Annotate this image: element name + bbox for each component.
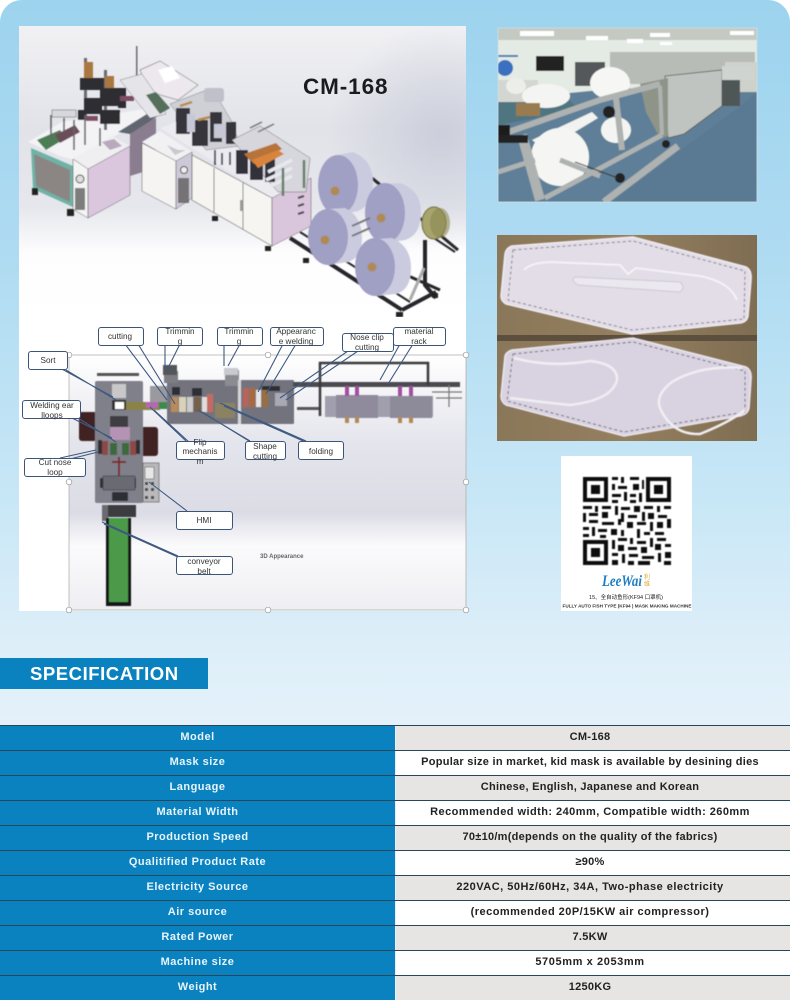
callout text: Cut nose <box>39 458 72 467</box>
callout text: mechanis <box>182 447 218 456</box>
callout text: belt <box>197 567 211 576</box>
heading: SPECIFICATION: SPECIFICATION <box>30 663 179 684</box>
QR caption: 15、全自动鱼形(KF94 口罩机) <box>589 593 663 601</box>
specification table <box>0 725 790 1000</box>
specification table: Air source <box>168 906 227 918</box>
callout text: Flip <box>193 438 207 447</box>
specification table: Production Speed <box>146 831 249 843</box>
specification table: Recommended width: 240mm, Compatible width: 260mm <box>430 806 750 818</box>
left station frame <box>31 148 73 207</box>
callout text: conveyor <box>187 557 221 566</box>
specification table: Electricity Source <box>147 881 248 893</box>
callout text: material <box>404 327 434 336</box>
front stations <box>232 126 310 192</box>
specification table: (recommended 20P/15KW air compressor) <box>471 906 709 918</box>
mid stations <box>170 88 240 150</box>
model name: CM-168 <box>303 74 388 99</box>
white cabinet <box>76 138 130 168</box>
heading: SPECIFICATION <box>0 658 208 689</box>
specification table: Model <box>180 731 215 743</box>
caption: 3D Appearance: 3D Appearance <box>260 554 304 560</box>
callout text: Appearanc <box>276 327 316 336</box>
white rolls <box>522 84 570 108</box>
callout text: Sort <box>40 356 56 365</box>
floor <box>498 82 757 202</box>
photo: production line in cleanroom <box>497 28 757 202</box>
specification table: Language <box>170 781 225 793</box>
aluminium frame <box>498 84 678 202</box>
specification table: 7.5KW <box>573 931 607 943</box>
mask front <box>501 237 751 334</box>
QR code card <box>561 456 692 611</box>
specification table: ≥90% <box>575 856 605 868</box>
logo: LeeWai: LeeWai <box>601 573 642 590</box>
callout text: Welding ear <box>30 401 74 410</box>
callout text: folding <box>309 447 334 456</box>
specification table: CM-168 <box>570 731 610 743</box>
material rack <box>290 178 458 310</box>
worktable left <box>28 108 156 160</box>
specification table: 70±10/m(depends on the quality of the fabrics) <box>462 831 718 843</box>
specification table: 5705mm x 2053mm <box>535 956 645 968</box>
callout text: loop <box>47 468 63 477</box>
callout labels <box>22 328 446 574</box>
mask back <box>501 338 751 436</box>
callout text: cutting <box>355 343 380 352</box>
specification table: Machine size <box>161 956 234 968</box>
material rolls <box>308 152 421 296</box>
callout text: HMI <box>196 516 212 525</box>
cabinet <box>665 70 722 138</box>
QR code card: FULLY AUTO FISH TYPE (KF94 ) MASK MAKING MACHINE <box>562 604 692 608</box>
specification table: Material Width <box>156 806 239 818</box>
callout text: lloops <box>41 411 63 420</box>
callout text: cutting <box>108 332 133 341</box>
callout text: g <box>178 337 183 346</box>
callout text: Shape <box>253 442 277 451</box>
transparent hopper <box>140 61 198 100</box>
ear loop towers <box>84 46 138 130</box>
nose wire spool <box>422 207 446 239</box>
illustration: 3D mask machine <box>28 46 458 317</box>
QR code card: 利 <box>644 573 650 581</box>
callout text: cutting <box>253 452 278 461</box>
QR code card: 维 <box>644 580 650 588</box>
callout text: Trimmin <box>224 327 254 336</box>
callout text: Nose clip <box>350 333 384 342</box>
callout text: rack <box>411 337 428 346</box>
callout text: g <box>237 337 242 346</box>
specification table: Qualitified Product Rate <box>129 856 266 868</box>
callout text <box>30 327 434 576</box>
plan drawing of machine <box>79 363 462 606</box>
specification table: Weight <box>178 981 217 993</box>
specification table: Chinese, English, Japanese and Korean <box>481 781 699 793</box>
machine drawings and photos <box>19 26 758 614</box>
specification table: Mask size <box>170 756 225 768</box>
long cabinet <box>160 122 310 198</box>
callout text: m <box>197 457 204 466</box>
panel: isometric machine rendering <box>19 23 466 317</box>
back equipment <box>536 56 564 71</box>
specification table: Rated Power <box>161 931 234 943</box>
connection body <box>130 118 156 176</box>
second cabinet <box>142 131 192 161</box>
leader lines <box>60 344 413 558</box>
callout text: e welding <box>279 337 314 346</box>
callout text: Trimmin <box>165 327 195 336</box>
specification table: 1250KG <box>569 981 611 993</box>
specification table: Popular size in market, kid mask is available by desining dies <box>421 756 759 768</box>
photo: two fish type masks <box>497 235 757 441</box>
QR code <box>583 477 671 565</box>
wall and ceiling <box>498 40 757 94</box>
panel: top view layout diagram <box>19 317 469 613</box>
specification table: 220VAC, 50Hz/60Hz, 34A, Two-phase electricity <box>456 881 724 893</box>
